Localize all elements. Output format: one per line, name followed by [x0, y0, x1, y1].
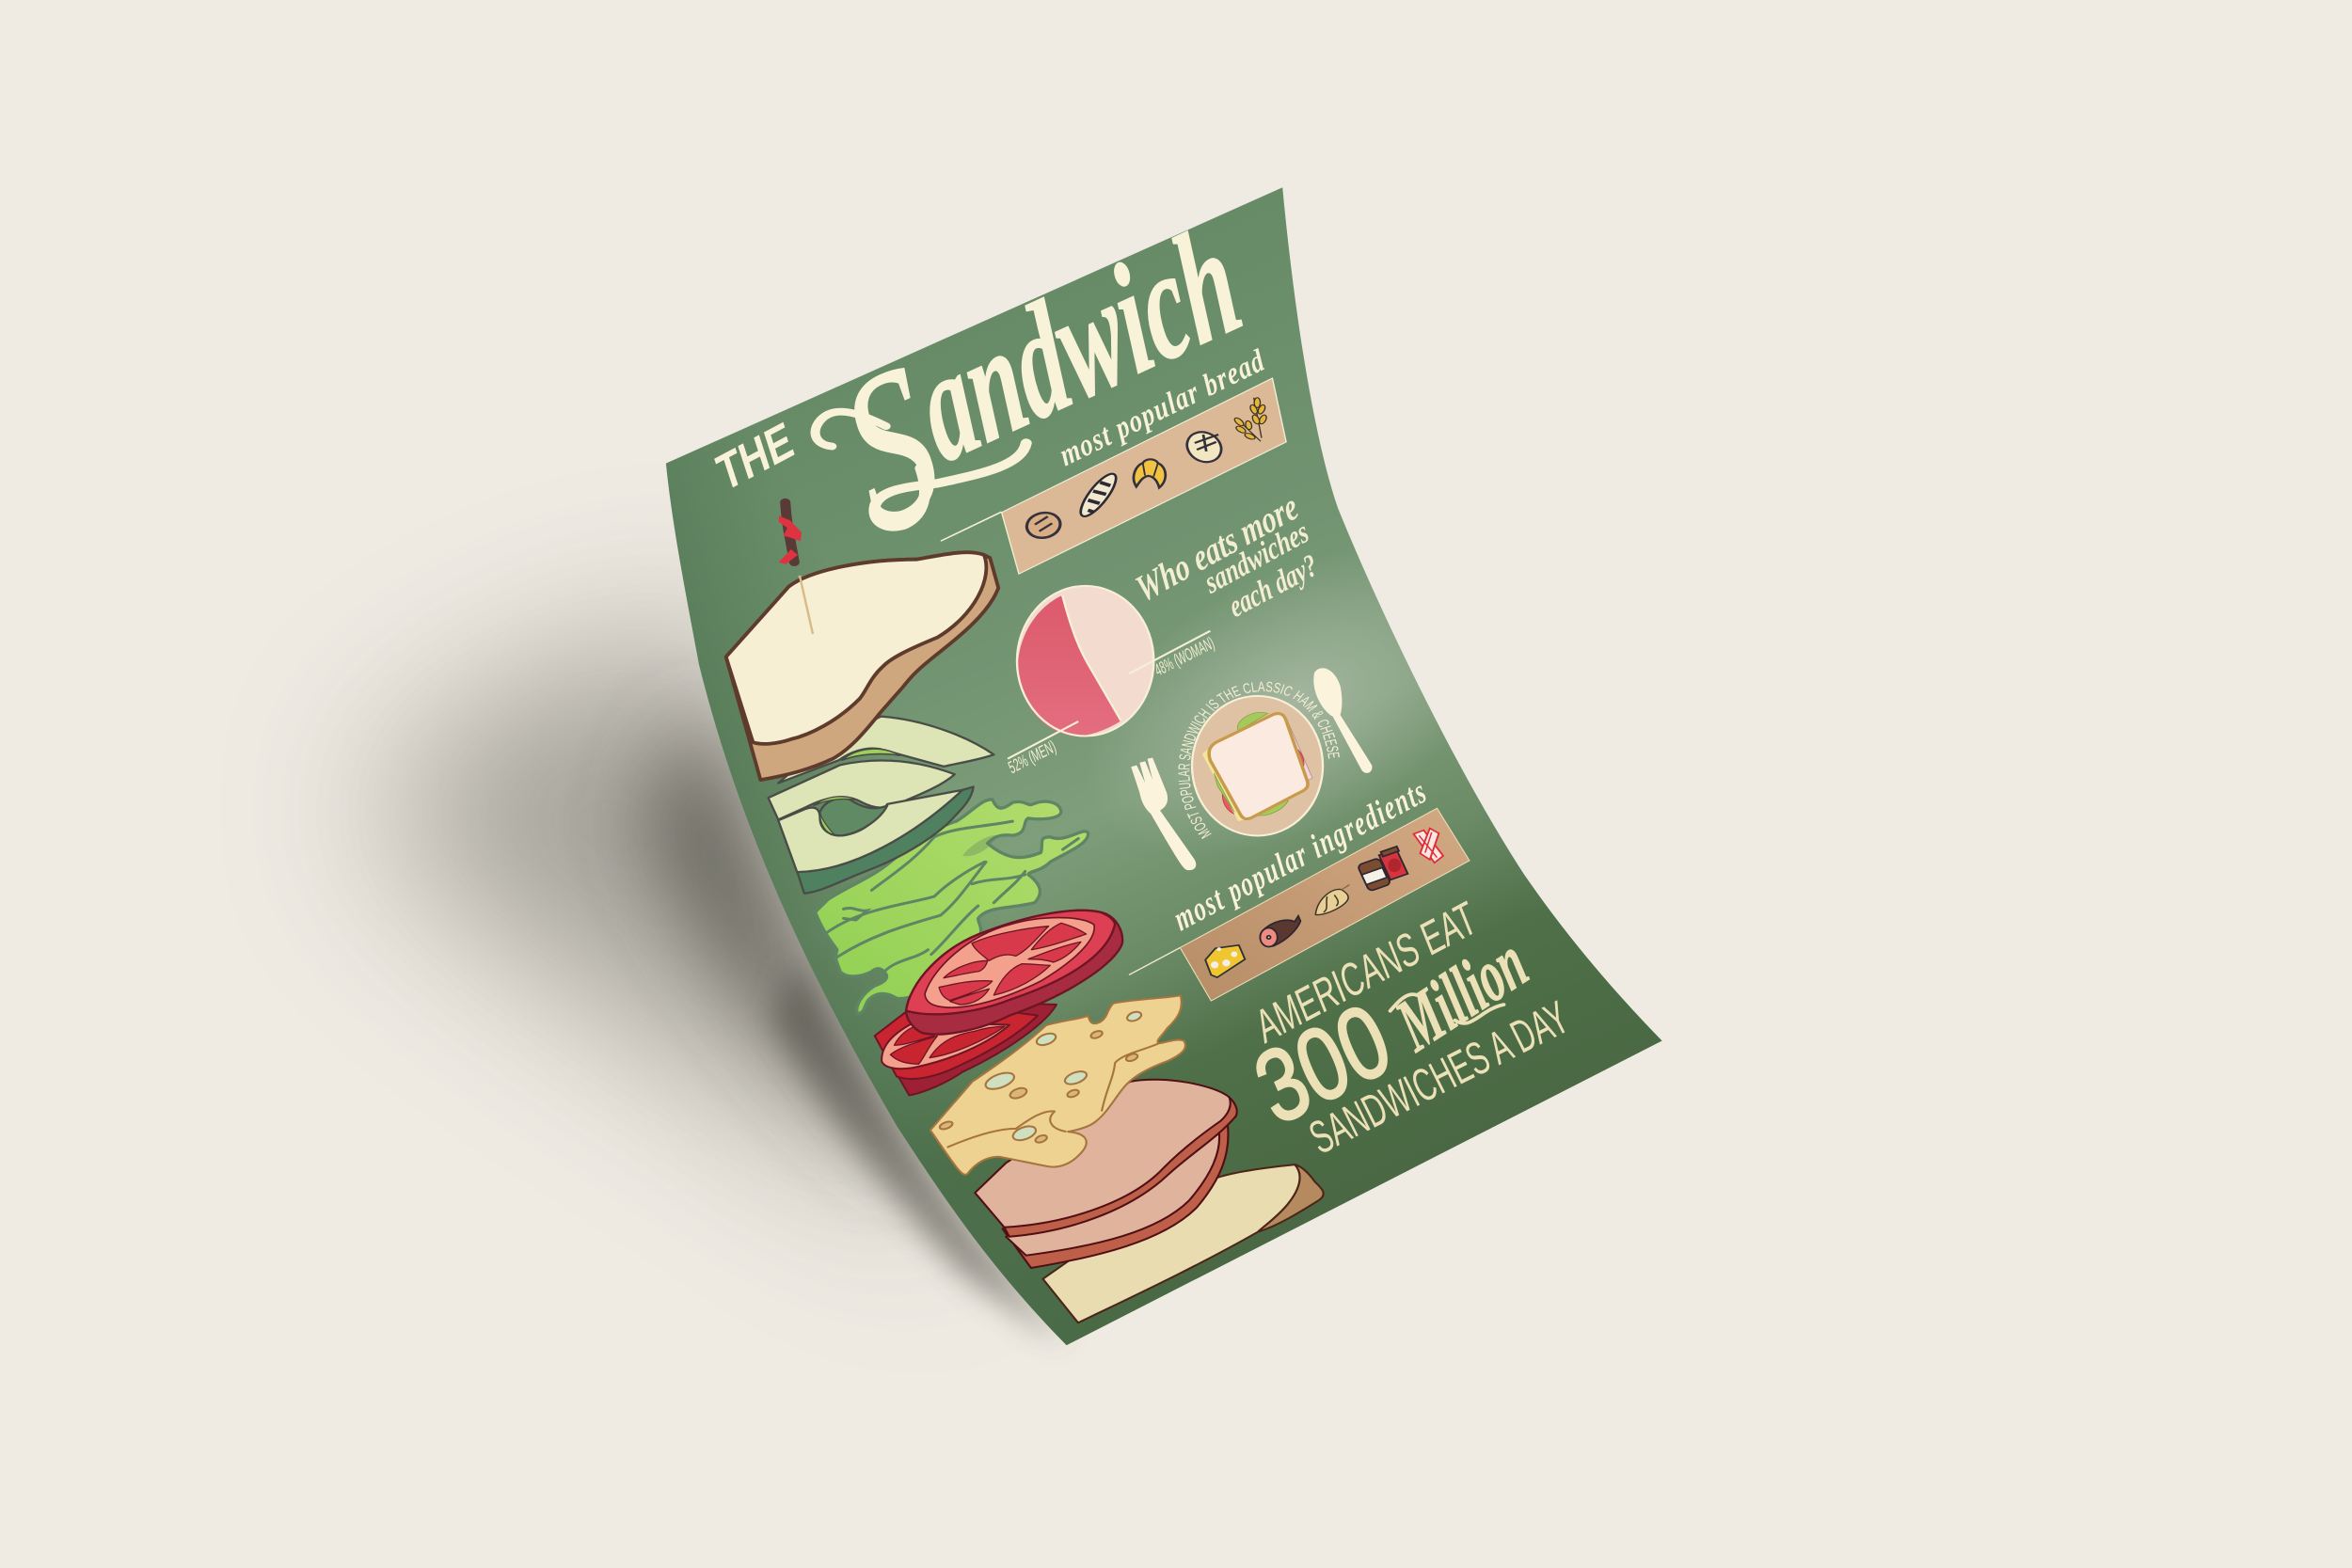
icon: jam jar [1379, 847, 1407, 879]
million swashes [1391, 994, 1503, 1023]
section: most popular ingredients [1129, 770, 1470, 1001]
stat: americans eat 300 million sandwiches a day: Million [1383, 920, 1540, 1069]
sandwich fillings [1202, 712, 1312, 821]
lettuce [816, 800, 1089, 1014]
poster sheet [666, 187, 1661, 1345]
stat: americans eat 300 million sandwiches a day [1239, 891, 1577, 1164]
labels: 48% (WOMAN) [1152, 632, 1217, 680]
icon: peanut butter jar [1358, 858, 1391, 892]
ham slices [975, 1080, 1237, 1268]
icon: loaf [1021, 508, 1067, 543]
sandwich wordmark: andwich [898, 191, 1258, 496]
section: most popular sandwich: MOST POPULAR SANDWICH IS THE CLASSIC HAM & CHEESE [1178, 681, 1340, 839]
bottom bread slice [1042, 1164, 1324, 1323]
plate [1192, 696, 1323, 835]
heading: most popular ingredients [1168, 770, 1433, 938]
icon: baguette [1074, 470, 1122, 519]
title swashes [816, 412, 1026, 527]
heading: who eats more: Who eats more [1130, 484, 1304, 610]
curved caption [1189, 691, 1330, 834]
icon: ham [1260, 916, 1300, 946]
heading: most popular bread [1055, 342, 1270, 473]
icon: wheat [1233, 398, 1268, 441]
toothpick tip over bread [800, 576, 813, 634]
tomato slice upper [906, 911, 1122, 1035]
toothpick [779, 502, 814, 634]
top bread slice with toothpick [726, 502, 998, 780]
icon: croissant [1134, 459, 1166, 487]
tomato slice lower [875, 1000, 1057, 1096]
bread panel [941, 378, 1286, 574]
stat: americans eat 300 million sandwiches a day: 300 [1239, 981, 1406, 1146]
icon: fork [1131, 758, 1196, 870]
men slice [1018, 595, 1121, 736]
pie chart [1006, 586, 1217, 777]
icon: chicken [1315, 885, 1349, 915]
labels [1006, 632, 1217, 777]
sandwich bread [1209, 714, 1308, 819]
ingredient panel [1129, 808, 1470, 1001]
avocado slices [769, 717, 993, 894]
the: THE [710, 412, 800, 502]
title [710, 178, 1273, 574]
heading: who eats more [1130, 484, 1322, 625]
bread slice [726, 552, 998, 780]
icon: round loaf [1181, 428, 1228, 467]
cast shadow [375, 630, 1067, 1345]
stat: americans eat 300 million sandwiches a day: SANDWICHES A DAY [1301, 991, 1577, 1164]
labels: 52% (MEN) [1006, 736, 1058, 777]
stat: americans eat 300 million sandwiches a day: AMERICANS EAT [1248, 891, 1483, 1053]
poster mockup scene [317, 187, 1661, 1345]
icon: spoon [1313, 668, 1372, 773]
pie [1008, 586, 1210, 759]
icon: bacon [1414, 829, 1443, 863]
section: most popular sandwich [1131, 668, 1372, 871]
icon: cheese [1205, 945, 1245, 977]
heading: who eats more: sandwiches [1200, 515, 1313, 601]
cheese slice [930, 995, 1185, 1175]
heading: who eats more: each day? [1224, 547, 1322, 625]
section: most popular bread [941, 342, 1286, 574]
sandwich wordmark: S [817, 319, 964, 574]
